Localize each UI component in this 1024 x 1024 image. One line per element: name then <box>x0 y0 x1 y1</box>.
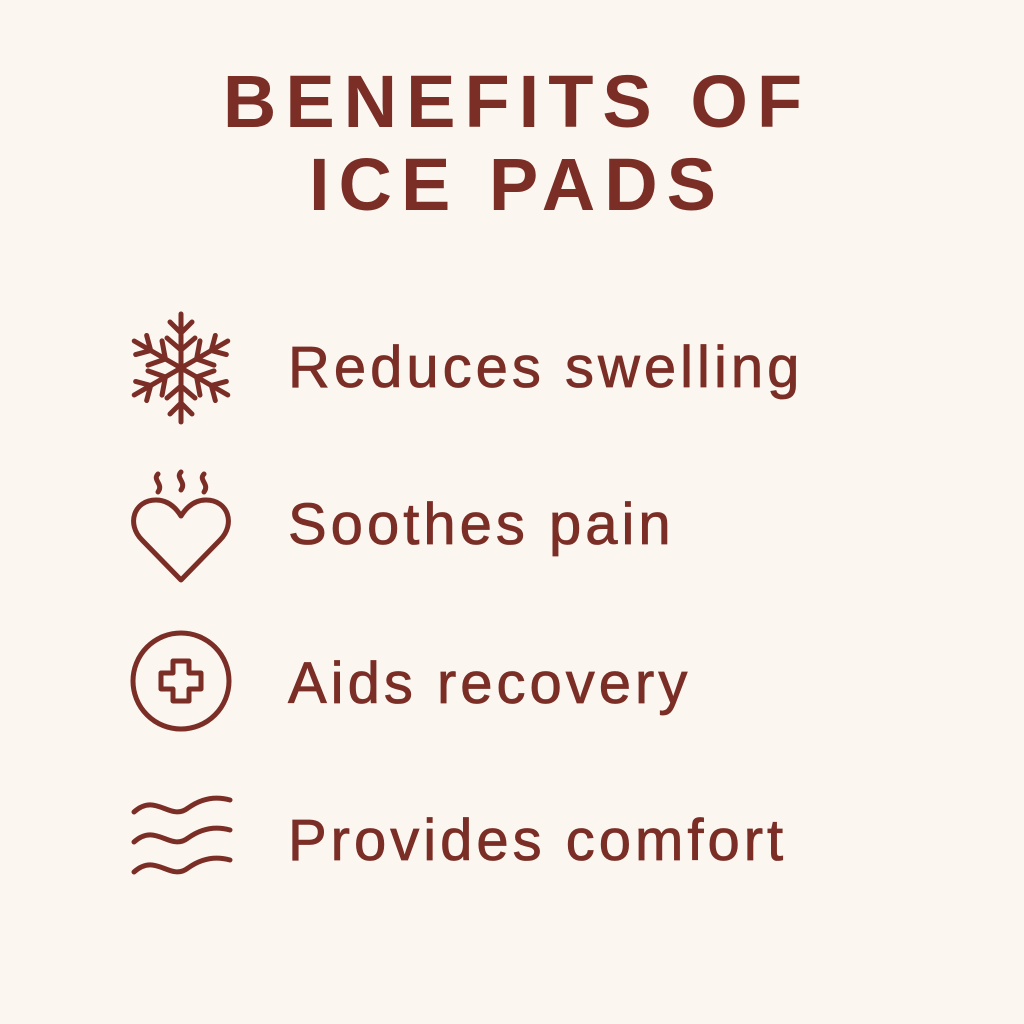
title: BENEFITS OF <box>223 60 811 143</box>
text: provides comfort: Provides comfort <box>288 808 787 873</box>
icon: waves <box>132 796 232 874</box>
title <box>223 60 811 226</box>
icon: medical cross in circle <box>130 630 232 732</box>
text: soothes pain: Soothes pain <box>288 492 675 557</box>
icon: heart with steam <box>131 470 231 582</box>
title: ICE PADS <box>309 143 725 226</box>
icon: snowflake <box>132 312 230 424</box>
text: reduces swelling: Reduces swelling <box>288 335 803 400</box>
text: aids recovery: Aids recovery <box>288 651 691 716</box>
